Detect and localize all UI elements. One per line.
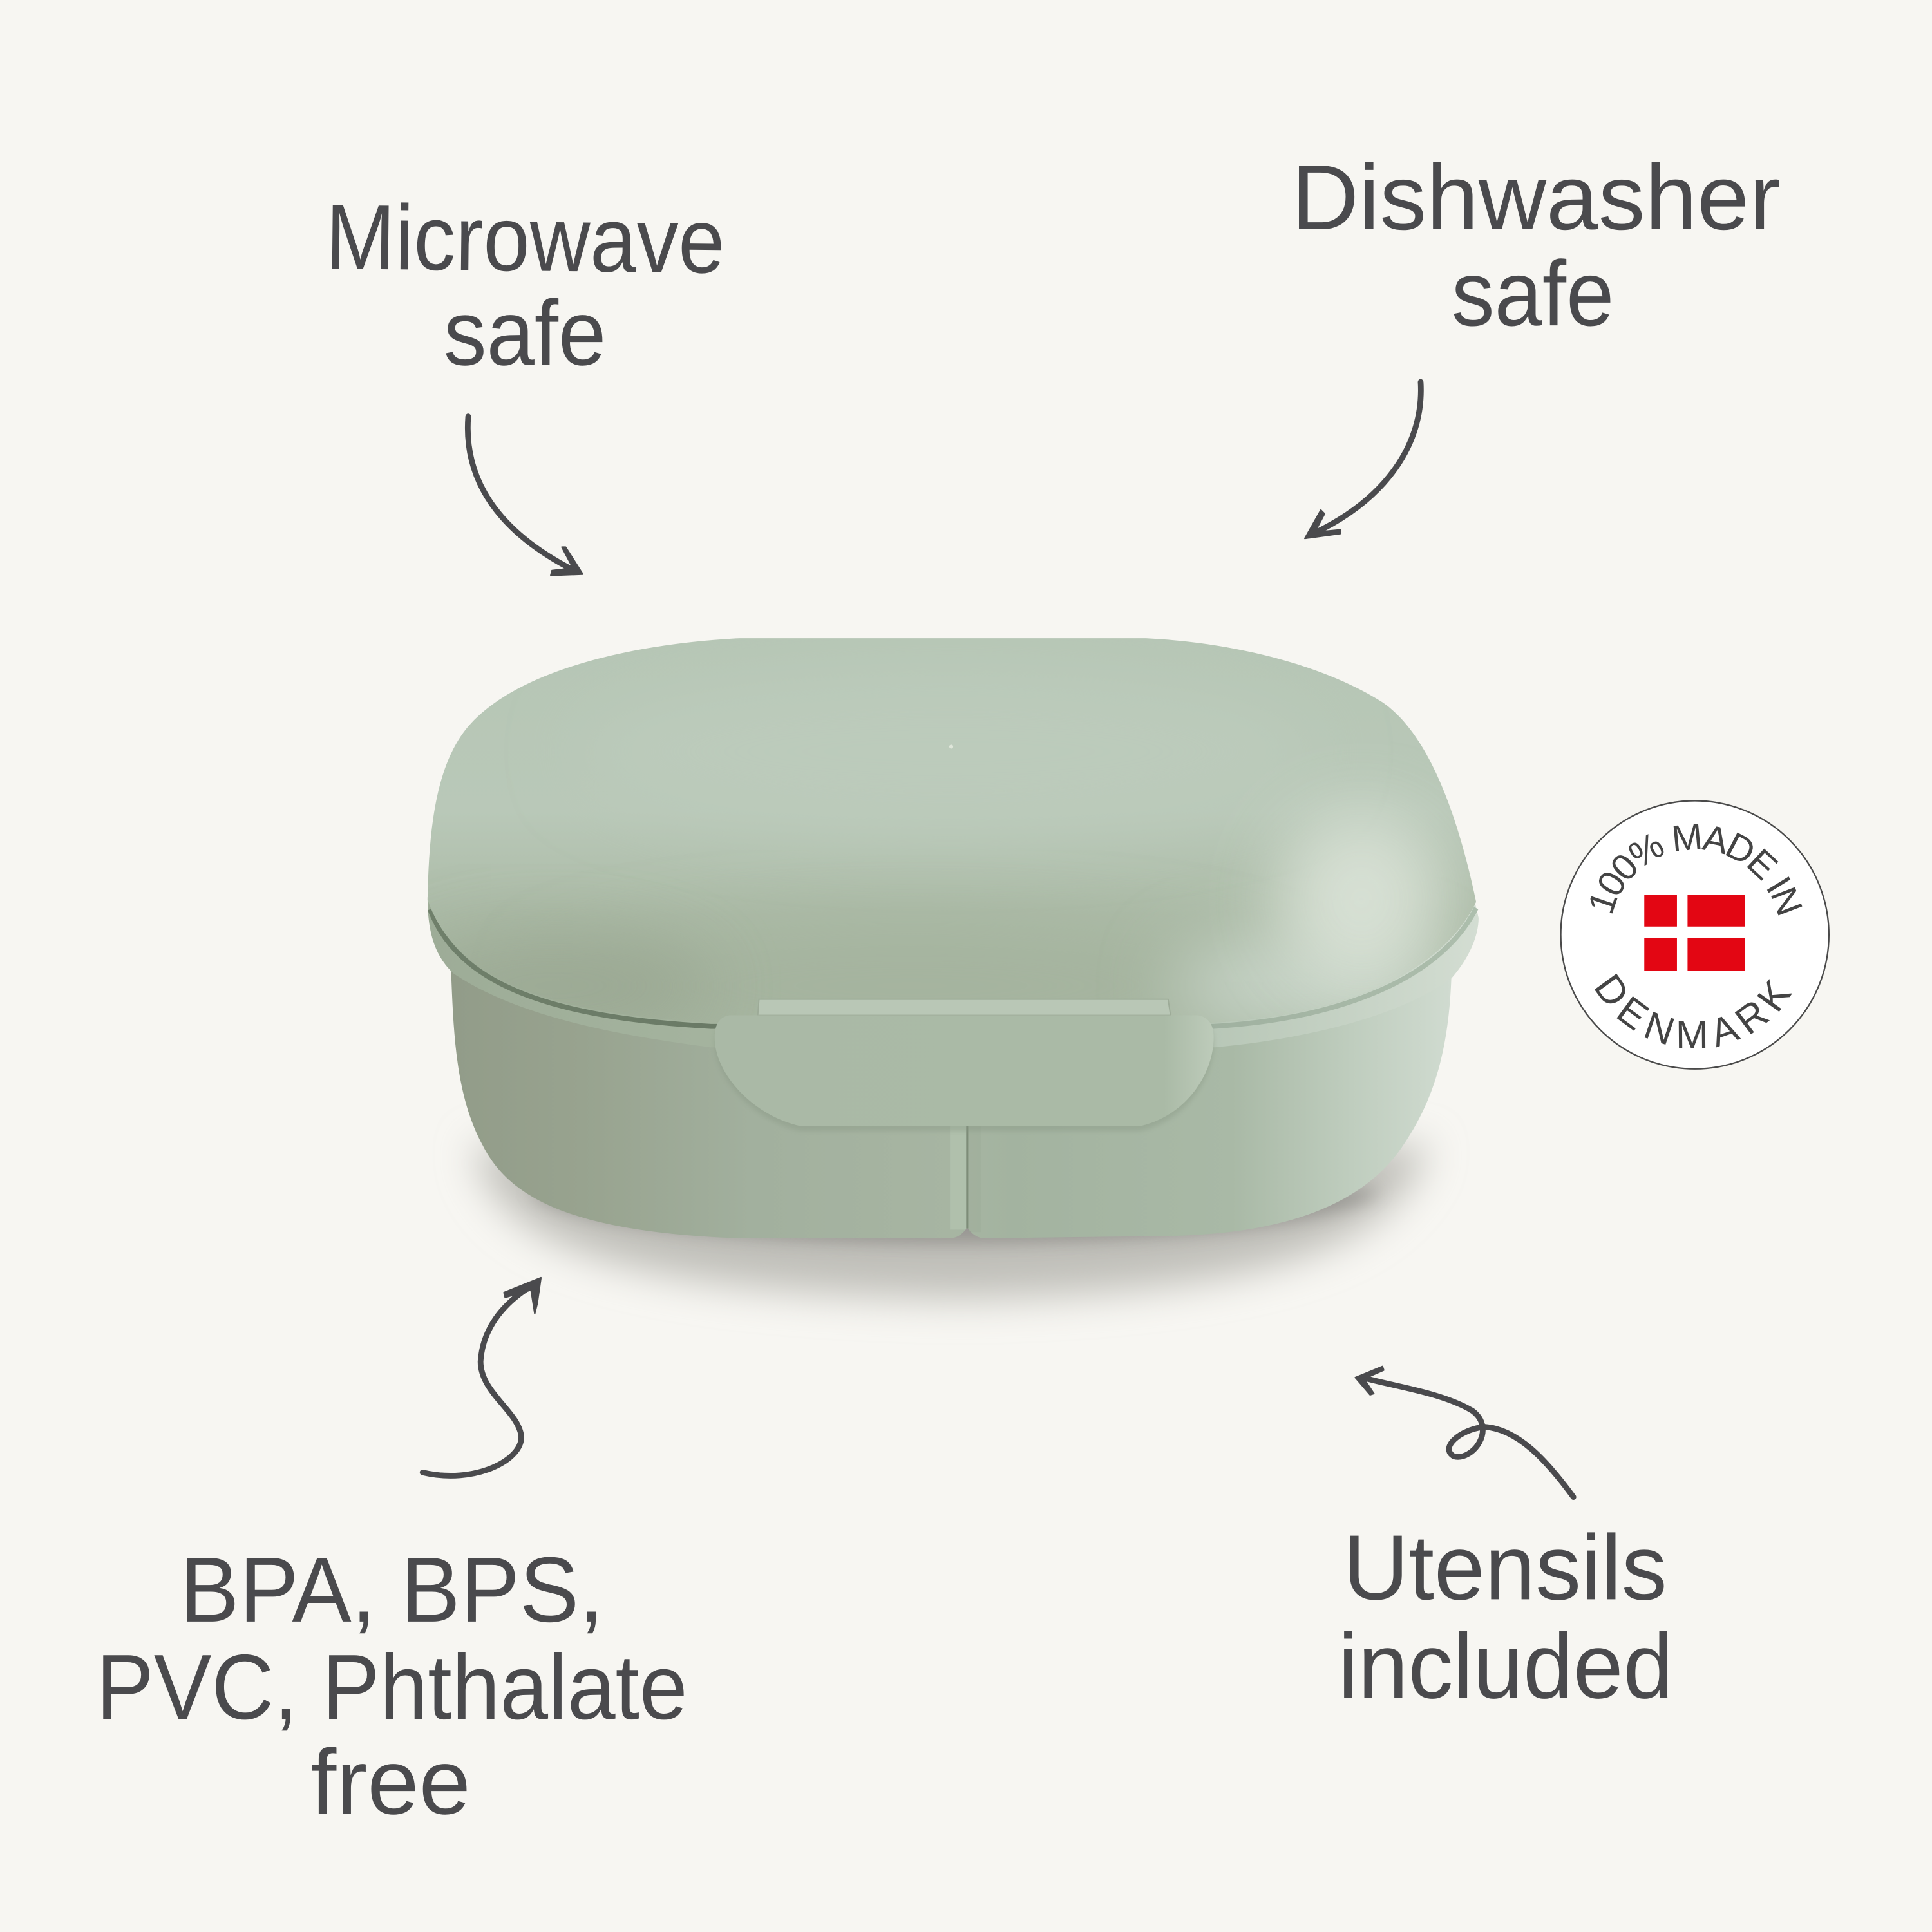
label: microwave safe — [325, 185, 725, 384]
label: dishwasher safe: Dishwasher — [1291, 146, 1781, 249]
arrow: BPA free to box — [422, 1278, 541, 1475]
badge: made in Denmark — [1560, 800, 1830, 1070]
label: utensils included: Utensils — [1343, 1516, 1667, 1619]
label: dishwasher safe — [1291, 146, 1781, 345]
gap between lid and base — [430, 908, 1476, 1027]
badge text bottom: DENMARK — [1595, 974, 1792, 1048]
label: BPA, BPS, PVC, Phthalate free: free — [310, 1730, 471, 1833]
Danish flag — [1644, 895, 1745, 971]
label: BPA, BPS, PVC, Phthalate free — [96, 1539, 688, 1833]
label: microwave safe: safe — [444, 281, 606, 384]
badge text top: 100% MADE IN — [1591, 823, 1802, 916]
label: dishwasher safe: safe — [1452, 242, 1614, 345]
label: BPA, BPS, PVC, Phthalate free: PVC, Phthalate — [96, 1636, 688, 1739]
box soft shadow — [475, 1146, 1429, 1299]
label: BPA, BPS, PVC, Phthalate free: BPA, BPS, — [180, 1539, 603, 1642]
box contact shadow — [530, 1189, 1380, 1244]
product: lunch box — [394, 638, 1479, 1299]
box base — [451, 967, 1452, 1238]
infographic canvas — [103, 162, 1830, 1815]
arrow: dishwasher to box — [1305, 382, 1421, 538]
latch shadow — [715, 1020, 1214, 1131]
arrow: utensils to box — [1356, 1367, 1573, 1497]
lid — [428, 638, 1476, 1023]
lid shading — [451, 795, 1471, 1023]
base flange — [428, 897, 1479, 1047]
label: utensils included: included — [1338, 1615, 1673, 1718]
latch — [715, 1016, 1214, 1126]
latch top tab — [758, 999, 1171, 1016]
lid centre dot — [949, 744, 953, 749]
badge circle — [1561, 800, 1829, 1069]
arrow: microwave to box — [468, 417, 583, 575]
label: microwave safe: Microwave — [325, 185, 725, 293]
label: utensils included — [1338, 1516, 1673, 1718]
base centre seam — [950, 1126, 981, 1232]
